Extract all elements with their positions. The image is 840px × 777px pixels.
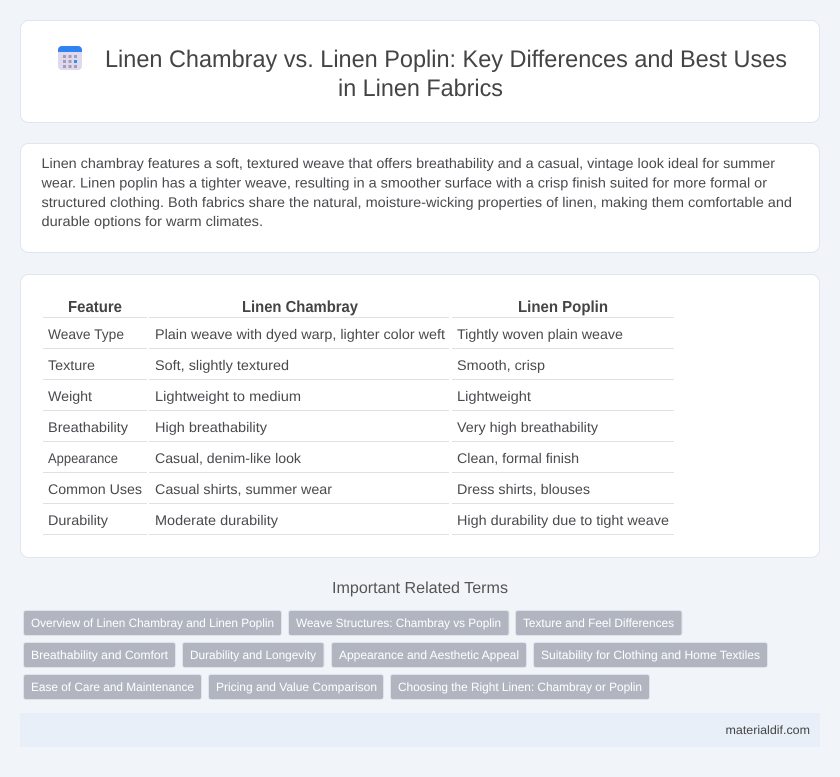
tag: texture and feel: Texture and Feel Differences [523,616,674,630]
tag: breathability: Breathability and Comfort [31,648,169,662]
tag: appearance [332,642,526,668]
panel: comparison table [20,274,820,558]
tag: durability: Durability and Longevity [190,648,316,662]
row: weave type: Plain weave with dyed warp, lighter color weft [155,326,445,342]
table header: Linen Poplin [518,299,608,316]
row: common uses: Common Uses [48,481,142,497]
row: breathability: High breathability [155,419,267,435]
tag: durability [182,642,324,668]
row: appearance: Clean, formal finish [457,450,579,466]
tag: suitability: Suitability for Clothing and Home Textiles [541,648,760,662]
row: texture: Soft, slightly textured [155,357,289,373]
row: weight [48,388,531,404]
related term tags [24,610,768,700]
tag: ease of care [24,674,202,700]
footer: materialdif.com [726,723,810,737]
tag: texture and feel [516,610,682,636]
footer [20,713,820,747]
panel: summary paragraph [20,144,820,252]
title [105,46,787,102]
tag: overview: Overview of Linen Chambray and Linen Poplin [31,616,274,630]
row: appearance [48,450,579,466]
icon: calendar [58,46,82,70]
row: durability: Durability [48,512,108,528]
table header [68,299,608,316]
row: texture [48,357,545,373]
row: common uses [48,481,590,497]
tag: choosing: Choosing the Right Linen: Chambray or Poplin [398,680,642,694]
tag: ease of care: Ease of Care and Maintenance [31,680,194,694]
row: durability: Moderate durability [155,512,278,528]
row: common uses: Dress shirts, blouses [457,481,590,497]
row: breathability: Very high breathability [457,419,598,435]
row: common uses: Casual shirts, summer wear [155,481,332,497]
title: in Linen Fabrics [338,75,503,102]
tag: choosing [390,674,650,700]
panel: summary paragraph: durable options for warm climates. [42,213,263,229]
tag: weave structures: Weave Structures: Chambray vs Poplin [296,616,501,630]
panel: summary paragraph: Linen chambray features a soft, textured weave that offers breathability and a casual, vintage look ideal for summer [42,155,775,171]
tag: suitability [534,642,768,668]
row: appearance: Casual, denim-like look [155,450,302,466]
row: weave type: Tightly woven plain weave [457,326,623,342]
panel: summary paragraph: structured clothing. Both fabrics share the natural, moisture-wicking properties of linen, making them comfortable and [42,194,792,210]
tag: breathability [24,642,176,668]
row: weight: Lightweight [457,388,531,404]
tag: overview [24,610,282,636]
row: appearance: Appearance [48,450,118,466]
panel: summary paragraph: wear. Linen poplin has a tighter weave, resulting in a smoother surface with a crisp finish suited for more formal or [40,175,767,191]
row: breathability [48,419,598,435]
table header: Feature [68,299,122,316]
heading: related terms: Important Related Terms [332,580,508,597]
title: Linen Chambray vs. Linen Poplin: Key Differences and Best Uses [105,46,787,73]
tag: pricing: Pricing and Value Comparison [216,680,377,694]
row: weave type: Weave Type [48,326,124,342]
tag: appearance: Appearance and Aesthetic Appeal [339,648,519,662]
row: texture: Smooth, crisp [457,357,545,373]
row: weave type [48,326,623,342]
row: texture: Texture [48,357,95,373]
row: breathability: Breathability [48,419,128,435]
row: durability: High durability due to tight weave [457,512,669,528]
row: durability [48,512,669,528]
row: weight: Lightweight to medium [155,388,301,404]
tag: weave structures [288,610,509,636]
row: weight: Weight [48,388,92,404]
tag: pricing [208,674,384,700]
panel: header [20,20,820,122]
table header: Linen Chambray [242,299,358,316]
